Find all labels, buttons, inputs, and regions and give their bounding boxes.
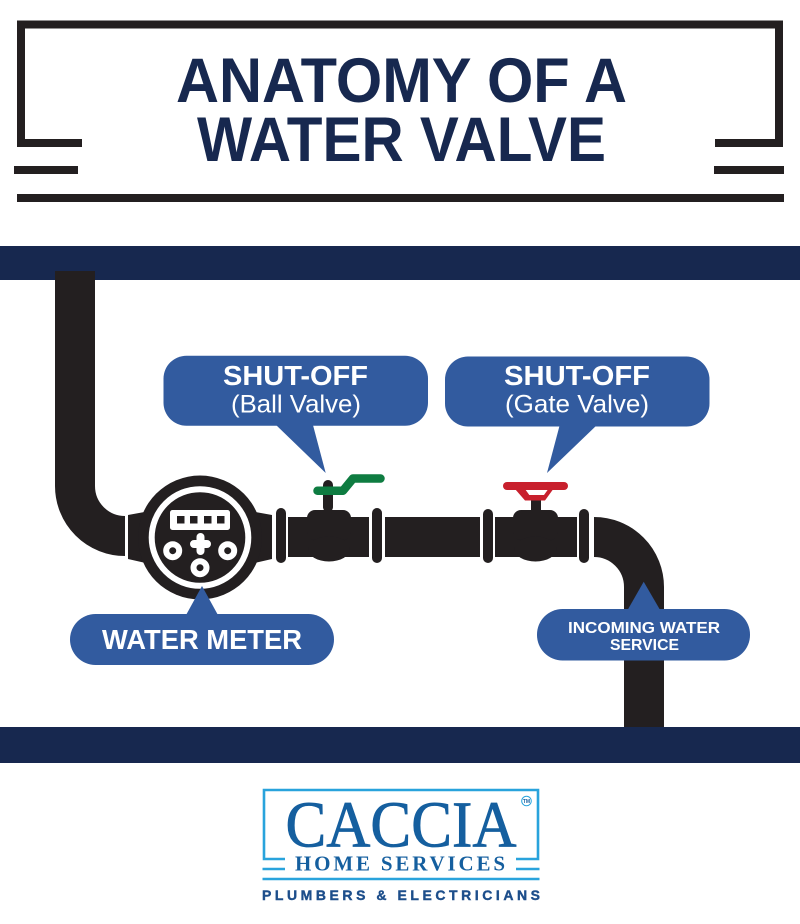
logo: Caccia Home Services: HOME SERVICES	[295, 852, 505, 876]
logo: Caccia Home Services: CACCIA	[286, 789, 517, 862]
pipe: middle section	[385, 517, 480, 557]
pipe: right elbow going down	[594, 537, 644, 727]
callout: incoming water service	[537, 582, 750, 660]
callout: water meter	[70, 586, 334, 665]
logo: Caccia Home Services: PLUMBERS & ELECTRICIANS	[262, 887, 540, 903]
bottom navy band	[0, 727, 800, 763]
callout: shut-off gate valve: SHUT-OFF	[504, 360, 650, 391]
callout: shut-off ball valve: SHUT-OFF	[223, 360, 368, 391]
title: ANATOMY OF A	[176, 46, 627, 116]
callout: shut-off gate valve	[445, 356, 710, 473]
logo: Caccia Home Services	[262, 789, 540, 903]
icon: gate valve	[483, 482, 589, 563]
icon: ball valve	[276, 478, 382, 563]
logo: Caccia Home Services: TM	[523, 799, 530, 805]
callout: water meter: WATER METER	[102, 624, 302, 655]
title	[176, 46, 627, 175]
icon: water meter	[128, 476, 272, 600]
top navy band	[0, 246, 800, 280]
pipe: left inlet elbow	[75, 271, 125, 536]
callout: incoming water service: INCOMING WATER	[568, 620, 720, 637]
callout: shut-off gate valve: (Gate Valve)	[505, 390, 649, 418]
title: WATER VALVE	[197, 105, 606, 175]
callout: incoming water service: SERVICE	[610, 637, 679, 654]
title frame	[14, 24, 784, 198]
callout: shut-off ball valve	[164, 356, 428, 473]
callout: shut-off ball valve: (Ball Valve)	[231, 390, 361, 418]
